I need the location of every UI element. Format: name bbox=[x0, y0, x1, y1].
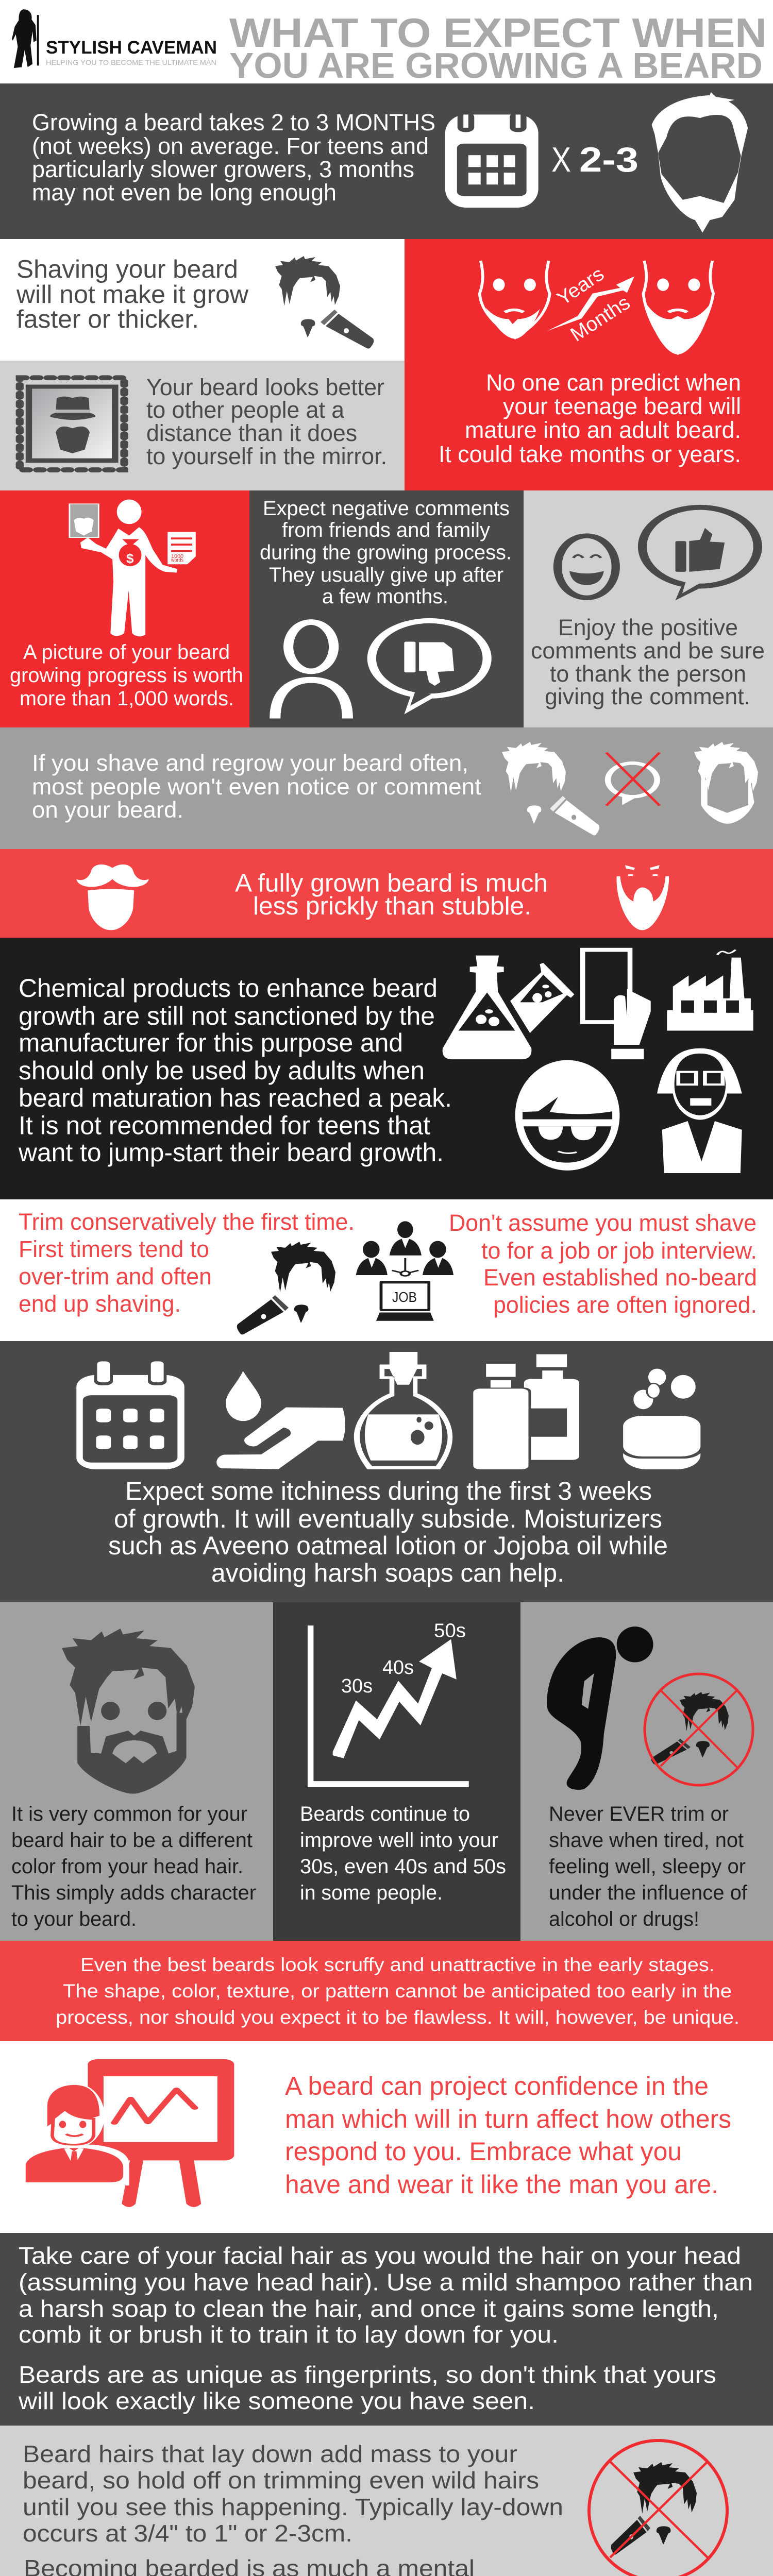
icon: adult beard face bbox=[643, 261, 713, 354]
text block: job policies: Don't assume you must shave bbox=[449, 1210, 757, 1236]
icon: mirror with hat and beard bbox=[20, 378, 124, 470]
icon: person outline bbox=[275, 622, 347, 719]
icon: teen with sunglasses bbox=[515, 1060, 619, 1171]
icon: hair with regrown beard bbox=[694, 742, 758, 824]
panel: nobody can predict maturity bbox=[405, 239, 773, 490]
icon: bearded head bbox=[652, 92, 748, 232]
chart: rising arrow with age labels: 30s bbox=[341, 1675, 373, 1697]
text block: colour: color from your head hair. bbox=[11, 1855, 243, 1878]
text block: growing time bbox=[32, 109, 435, 206]
text block: care bbox=[19, 2242, 753, 2348]
text block: fingerprints: Beards are as unique as fingerprints, so don't think that yours bbox=[19, 2361, 716, 2388]
logo name: STYLISH CAVEMAN bbox=[46, 38, 217, 58]
document label bbox=[171, 554, 183, 563]
text block: growing time: (not weeks) on average. For teens and bbox=[32, 133, 429, 159]
text block: confidence: man which will in turn affect how others bbox=[285, 2105, 731, 2133]
text block: growing time: may not even be long enough bbox=[32, 179, 337, 206]
text block: confidence: have and wear it like the man you are. bbox=[285, 2170, 718, 2199]
text block: positive comments: comments and be sure bbox=[531, 638, 765, 664]
text block: colour bbox=[11, 1803, 256, 1930]
text block: confidence bbox=[285, 2072, 731, 2199]
text block: age: 30s, even 40s and 50s bbox=[300, 1855, 506, 1878]
panel: beard colour differs bbox=[0, 1602, 273, 1941]
text block: job policies bbox=[449, 1210, 757, 1318]
panel: shave and regrow bbox=[0, 727, 773, 849]
document label: 1000 bbox=[171, 554, 183, 560]
text block: negative comments: a few months. bbox=[322, 585, 448, 608]
icon: man holding picture and document bbox=[70, 500, 196, 636]
text block: care: a harsh soap to clean the hair, and once it gains some length, bbox=[19, 2295, 719, 2322]
text block: positive comments: giving the comment. bbox=[545, 684, 750, 709]
text block: colour: It is very common for your bbox=[11, 1803, 247, 1825]
panel: beards improve with age bbox=[273, 1602, 520, 1941]
panel: chemical products warning bbox=[0, 938, 773, 1199]
icon: adult in suit with glasses bbox=[657, 1048, 742, 1173]
icon: speech bubble with thumb up bbox=[638, 505, 762, 600]
text block: confidence: A beard can project confidence in the bbox=[285, 2072, 709, 2100]
text block: itchiness bbox=[108, 1477, 668, 1587]
text block: chemicals: beard maturation has reached a peak. bbox=[19, 1083, 452, 1112]
text block: trim conservatively bbox=[19, 1209, 355, 1317]
icon: stern bearded face bbox=[616, 865, 669, 930]
text block: negative comments: They usually give up after bbox=[269, 564, 503, 586]
panel: early stages bbox=[0, 1941, 773, 2041]
text block: chemicals: It is not recommended for teens that bbox=[19, 1111, 430, 1140]
text block: prediction: No one can predict when bbox=[486, 369, 741, 396]
text block: job policies: policies are often ignored. bbox=[493, 1292, 757, 1318]
title: WHAT TO EXPECT WHEN bbox=[229, 10, 767, 56]
text block: mirror: to yourself in the mirror. bbox=[146, 443, 387, 469]
panel: trimming and job interviews bbox=[0, 1199, 773, 1341]
icon: head with hair and dark beard bbox=[62, 1629, 195, 1794]
icon: hair, goatee and clipper bbox=[275, 256, 374, 349]
text block: itchiness: such as Aveeno oatmeal lotion or Jojoba oil while bbox=[108, 1531, 668, 1560]
text block: chemicals: Chemical products to enhance beard bbox=[19, 974, 438, 1003]
text block: regrow: on your beard. bbox=[32, 798, 183, 823]
text block: trim conservatively: end up shaving. bbox=[19, 1291, 181, 1317]
icon: lotion bottles bbox=[471, 1354, 579, 1471]
logo tagline: HELPING YOU TO BECOME THE ULTIMATE MAN bbox=[46, 58, 216, 66]
icon: oil bottle bbox=[354, 1352, 452, 1469]
panel: shaving will not make it grow bbox=[0, 239, 405, 361]
text block: mirror: to other people at a bbox=[146, 397, 345, 423]
panel: lay down and mental transformation bbox=[0, 2426, 773, 2576]
text block: prickly: A fully grown beard is much bbox=[235, 869, 548, 897]
icon: caveman logo silhouette bbox=[12, 9, 39, 68]
multiplier label: X bbox=[551, 140, 571, 179]
text block: age: in some people. bbox=[300, 1882, 443, 1904]
multiplier label bbox=[551, 140, 638, 179]
text block: mirror: distance than it does bbox=[146, 420, 357, 446]
text block: shaving: Shaving your beard bbox=[16, 255, 238, 283]
title: YOU ARE GROWING A BEARD bbox=[229, 45, 763, 86]
text block: shaving bbox=[16, 255, 248, 333]
text block: positive comments bbox=[531, 615, 765, 709]
icon: smiling face bbox=[558, 536, 616, 598]
chart: rising arrow with age labels bbox=[308, 1620, 469, 1787]
text block: trim conservatively: over-trim and often bbox=[19, 1263, 212, 1290]
text block: tired: feeling well, sleepy or bbox=[549, 1855, 746, 1878]
icon: drop and hand bbox=[216, 1371, 345, 1469]
panel: positive comments bbox=[524, 490, 773, 727]
chart: rising arrow with age labels: 50s bbox=[434, 1620, 466, 1642]
text block: regrow: If you shave and regrow your beard often, bbox=[32, 751, 468, 776]
text block: shaving: will not make it grow bbox=[16, 280, 248, 309]
text block: positive comments: Enjoy the positive bbox=[558, 615, 738, 640]
icon: speech bubble with thumb down bbox=[367, 618, 492, 714]
text block: regrow: most people won't even notice or comment bbox=[32, 774, 482, 800]
text block: lay down bbox=[23, 2441, 563, 2547]
icon: no trimming sign bbox=[645, 1674, 753, 1785]
text block: age bbox=[300, 1803, 506, 1904]
text block: growing time: particularly slower growers, 3 months bbox=[32, 156, 414, 182]
text block: regrow bbox=[32, 751, 482, 823]
text block: confidence: respond to you. Embrace what you bbox=[285, 2137, 682, 2166]
icon: tilted flask bbox=[510, 963, 574, 1033]
text block: chemicals: growth are still not sanctioned by the bbox=[19, 1002, 435, 1030]
panel: header bbox=[0, 0, 773, 86]
text block: lay down: beard, so hold off on trimming even wild hairs bbox=[23, 2467, 539, 2494]
panel: picture worth 1000 words bbox=[0, 490, 249, 727]
text block: tired: under the influence of bbox=[549, 1882, 748, 1904]
icon: soap and bubbles bbox=[620, 1369, 703, 1469]
text block: shaving: faster or thicker. bbox=[16, 305, 199, 333]
text block: tired: Never EVER trim or bbox=[549, 1803, 729, 1825]
text block: lay down: Beard hairs that lay down add mass to your bbox=[23, 2441, 517, 2467]
text block: prickly: less prickly than stubble. bbox=[253, 892, 531, 920]
text block: negative comments: from friends and family bbox=[282, 519, 490, 541]
text block: age: Beards continue to bbox=[300, 1803, 470, 1825]
chart: rising arrow with age labels: 40s bbox=[382, 1657, 414, 1679]
text block: picture bbox=[10, 641, 243, 710]
icon: hair, goatee and clipper bbox=[237, 1242, 335, 1334]
text block: prediction: It could take months or years. bbox=[439, 441, 741, 467]
panel: confidence bbox=[0, 2041, 773, 2233]
icon: mustache and beard bbox=[76, 865, 149, 930]
icon: no trimming sign bbox=[589, 2441, 727, 2576]
text block: prickly bbox=[235, 869, 548, 920]
text block: tired bbox=[549, 1803, 748, 1930]
text block: colour: to your beard. bbox=[11, 1908, 137, 1930]
text block: early stages bbox=[56, 1954, 740, 2028]
icon: dollar sign: $ bbox=[126, 551, 134, 566]
text block: early stages: process, nor should you expect it to be flawless. It will, however, be unique. bbox=[56, 2006, 740, 2028]
text block: picture: A picture of your beard bbox=[23, 641, 230, 664]
arrow label: months: Months bbox=[566, 292, 634, 346]
icon: hair, goatee and clipper bbox=[502, 742, 599, 835]
multiplier label: 2-3 bbox=[579, 140, 638, 179]
text block: trim conservatively: First timers tend to bbox=[19, 1236, 209, 1262]
text block: tired: shave when tired, not bbox=[549, 1829, 744, 1852]
text block: fingerprints bbox=[18, 2361, 716, 2414]
text block: lay down: occurs at 3/4" to 1" or 2-3cm. bbox=[23, 2520, 352, 2547]
icon: upright flask bbox=[443, 956, 531, 1059]
icon: factory bbox=[667, 950, 753, 1031]
text block: chemicals: should only be used by adults when bbox=[19, 1056, 425, 1085]
text block: job policies: Even established no-beard bbox=[483, 1264, 757, 1291]
text block: mirror: Your beard looks better bbox=[146, 374, 384, 400]
text block: chemicals bbox=[18, 974, 452, 1167]
text block: picture: growing progress is worth bbox=[10, 664, 243, 687]
text block: chemicals: manufacturer for this purpose and bbox=[19, 1028, 403, 1057]
text block: job policies: to for a job or job interview. bbox=[481, 1238, 757, 1264]
icon: interview group with laptop bbox=[356, 1221, 453, 1321]
panel: never trim when tired bbox=[520, 1602, 773, 1941]
text block: care: Take care of your facial hair as you would the hair on your head bbox=[19, 2242, 741, 2269]
text block: positive comments: to thank the person bbox=[550, 662, 746, 687]
icon: presenter at chart board bbox=[20, 2059, 234, 2207]
icon: slumped figure bbox=[547, 1626, 653, 1790]
arrow: months to years bbox=[547, 276, 634, 331]
text block: colour: beard hair to be a different bbox=[11, 1829, 253, 1852]
title bbox=[229, 10, 767, 86]
text block: trim conservatively: Trim conservatively the first time. bbox=[19, 1209, 355, 1235]
text block: chemicals: want to jump-start their beard growth. bbox=[18, 1138, 444, 1167]
text block: mirror bbox=[146, 374, 387, 469]
panel: care for facial hair bbox=[0, 2233, 773, 2426]
icon: crossed out speech bubble bbox=[607, 753, 660, 806]
text block: age: improve well into your bbox=[300, 1829, 498, 1852]
text block: lay down: until you see this happening. Typically lay-down bbox=[23, 2494, 563, 2520]
panel: less prickly than stubble bbox=[0, 849, 773, 938]
icon: teenage beard face bbox=[480, 261, 550, 339]
text block: itchiness: of growth. It will eventually subside. Moisturizers bbox=[114, 1504, 662, 1533]
text block: early stages: Even the best beards look scruffy and unattractive in the early stages. bbox=[80, 1954, 715, 1975]
icon: hand holding phone bbox=[580, 948, 651, 1059]
panel: negative comments bbox=[249, 490, 524, 727]
text block: negative comments: Expect negative comments bbox=[263, 497, 510, 520]
panel: itchiness bbox=[0, 1341, 773, 1602]
text block: itchiness: Expect some itchiness during the first 3 weeks bbox=[125, 1477, 652, 1505]
text block: prediction: mature into an adult beard. bbox=[465, 417, 741, 443]
text block: growing time: Growing a beard takes 2 to 3 MONTHS bbox=[32, 109, 435, 135]
text block: picture: more than 1,000 words. bbox=[20, 687, 234, 710]
text block: prediction bbox=[439, 369, 741, 467]
panel: growing takes 2 to 3 months bbox=[0, 83, 773, 239]
text block: fingerprints: will look exactly like someone you have seen. bbox=[18, 2387, 535, 2414]
icon: calendar bbox=[76, 1360, 184, 1469]
text block: prediction: your teenage beard will bbox=[503, 393, 741, 419]
text block: care: comb it or brush it to train it to lay down for you. bbox=[19, 2321, 559, 2348]
text block: colour: This simply adds character bbox=[11, 1882, 256, 1904]
text block: negative comments bbox=[260, 497, 512, 608]
document label: words bbox=[171, 557, 183, 563]
text block: early stages: The shape, color, texture, or pattern cannot be anticipated too early in the bbox=[63, 1980, 732, 2002]
panel: looks better from a distance bbox=[0, 361, 405, 490]
icon: calendar bbox=[445, 112, 539, 208]
text block: tired: alcohol or drugs! bbox=[549, 1908, 699, 1930]
text block: itchiness: avoiding harsh soaps can help. bbox=[211, 1558, 564, 1587]
text block: care: (assuming you have head hair). Use a mild shampoo rather than bbox=[19, 2269, 753, 2296]
text block: negative comments: during the growing process. bbox=[260, 541, 512, 564]
arrow label: years: Years bbox=[553, 263, 608, 310]
laptop label: JOB bbox=[392, 1289, 417, 1305]
